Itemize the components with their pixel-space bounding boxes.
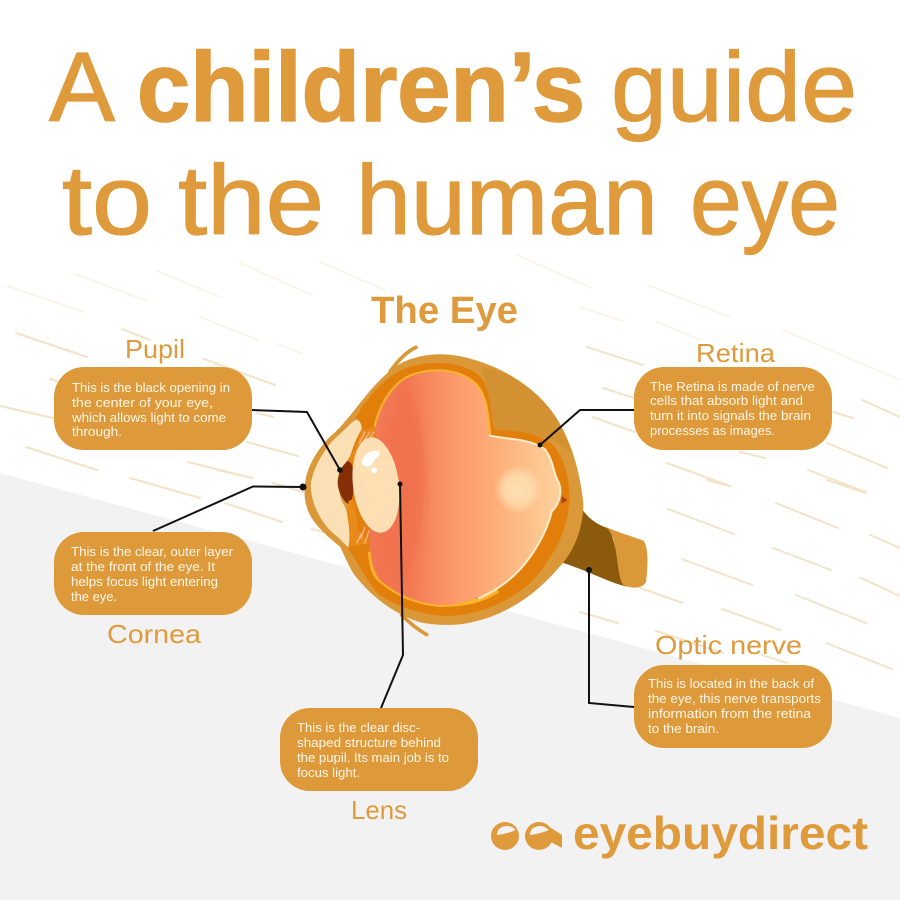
heading: The Eye: The Eye [371, 290, 518, 332]
label: Retina: Retina [696, 338, 776, 368]
callout: cornea: at the front of the eye. It [71, 559, 215, 574]
callout: lens: the pupil. Its main job is to [297, 750, 449, 765]
title: eye [690, 145, 840, 255]
background: white top with grey lower wedge [0, 473, 900, 900]
title: A [49, 32, 116, 142]
label: Optic nerve: Optic nerve [655, 630, 802, 660]
callout: retina: turn it into signals the brain [650, 408, 811, 423]
shaded crescent [368, 380, 425, 593]
title: guide [611, 32, 857, 142]
cornea [311, 419, 362, 547]
vitreous body [370, 371, 560, 605]
title: to [62, 145, 152, 255]
callout: lens: shaped structure behind [297, 735, 441, 750]
callout: optic nerve: to the brain. [648, 721, 719, 736]
leader line: retina [538, 410, 634, 448]
sclera outer wall [305, 354, 583, 625]
title: the [178, 145, 324, 255]
callout: retina: cells that absorb light and [650, 393, 803, 408]
label: Lens: Lens [351, 795, 407, 825]
retina yellow border [370, 371, 497, 605]
callout: pupil: which allows light to come [71, 410, 226, 425]
leader line: lens [381, 482, 403, 708]
title: children’s [137, 32, 585, 142]
callout: optic nerve: the eye, this nerve transports [648, 691, 821, 706]
title: human [356, 145, 658, 255]
callout: retina [634, 367, 832, 450]
retina pale edge [478, 436, 560, 599]
callout: cornea: helps focus light entering [71, 574, 218, 589]
callout: lens: This is the clear disc- [297, 720, 420, 735]
callout: lens [280, 708, 478, 791]
callout: retina: The Retina is made of nerve [650, 379, 815, 394]
optic disc [562, 496, 567, 504]
callout: cornea: This is the clear, outer layer [71, 544, 234, 559]
macula glow [494, 465, 542, 513]
ciliary muscle [348, 427, 376, 547]
callout: cornea: the eye. [71, 589, 117, 604]
callout: lens: focus light. [297, 765, 360, 780]
lens [347, 435, 405, 535]
callout: pupil: through. [72, 424, 122, 439]
choroid layer [347, 363, 569, 616]
callout: retina: processes as images. [650, 423, 775, 438]
callout: pupil: the center of your eye, [72, 395, 213, 410]
background light rays [0, 255, 900, 669]
callout: cornea [54, 532, 252, 615]
callout: pupil: This is the black opening in [72, 380, 230, 395]
logo: eyebuydirect [491, 807, 868, 859]
callout: pupil [54, 367, 252, 450]
eyelid flap lines [390, 347, 427, 635]
lens highlight [362, 451, 380, 473]
wordmark: eyebuydirect [573, 807, 868, 859]
icon: glasses [491, 822, 562, 850]
label: Cornea: Cornea [107, 619, 202, 649]
sclera shading [482, 367, 573, 457]
leader line: optic nerve [586, 567, 634, 707]
iris [338, 461, 354, 504]
crescent light edge [369, 380, 425, 592]
callout: optic nerve: This is located in the back of [648, 676, 814, 691]
optic nerve [560, 510, 648, 588]
title [49, 32, 857, 255]
leader line: pupil [252, 410, 343, 473]
leader line: cornea [153, 484, 306, 531]
label: Pupil: Pupil [125, 334, 185, 364]
callout: optic nerve [634, 665, 832, 748]
callout: optic nerve: information from the retina [648, 706, 812, 721]
eye diagram [305, 347, 648, 635]
